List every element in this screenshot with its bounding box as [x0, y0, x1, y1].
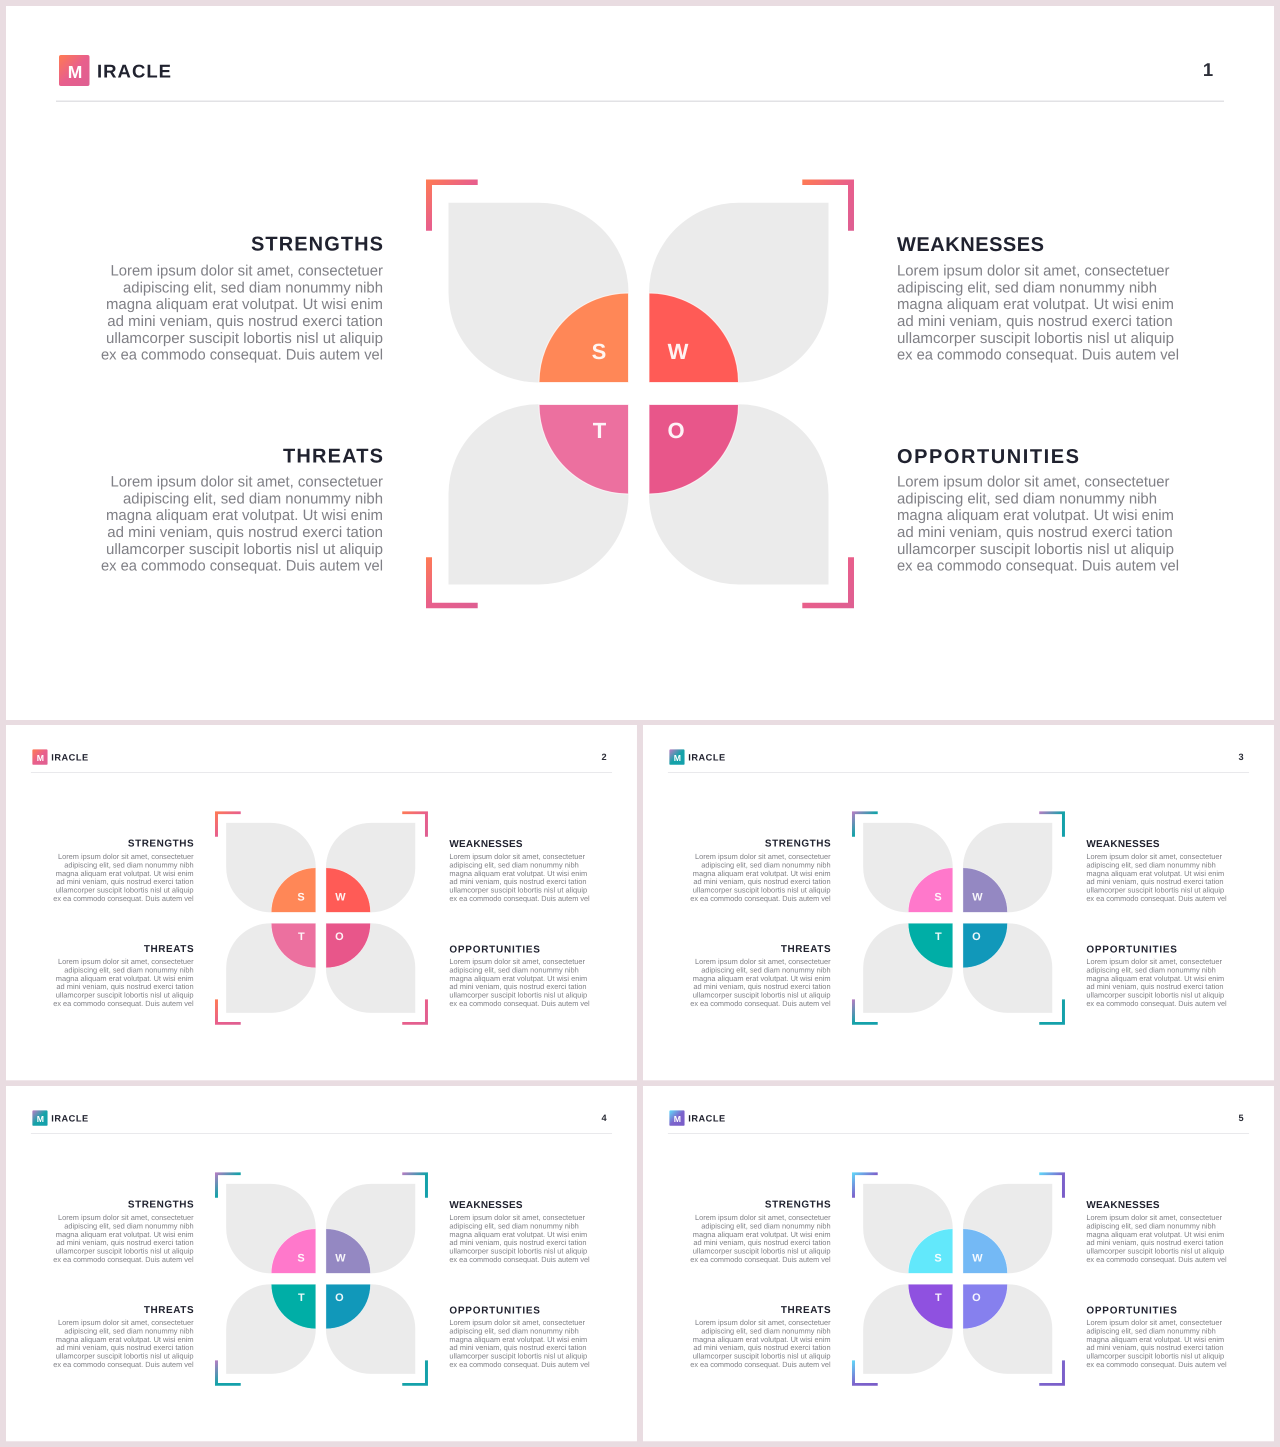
text: opportunities: adipiscing elit, sed diam nonummy nibh [1086, 966, 1216, 974]
text: strengths: magna aliquam erat volutpat. Ut wisi enim [693, 869, 831, 878]
text: weaknesses: magna aliquam erat volutpat. Ut wisi enim [449, 1230, 587, 1239]
text: weaknesses: Lorem ipsum dolor sit amet, consectetuer [449, 853, 585, 861]
quadrant O: O [972, 930, 981, 942]
text: weaknesses [1086, 1214, 1227, 1264]
quadrant O [963, 1284, 1007, 1329]
text: threats: Lorem ipsum dolor sit amet, consectetuer [695, 958, 831, 966]
heading: strengths: STRENGTHS [765, 1199, 831, 1210]
text: strengths: adipiscing elit, sed diam nonummy nibh [123, 279, 383, 296]
quadrant T: T [935, 1291, 942, 1303]
text: weaknesses: magna aliquam erat volutpat. Ut wisi enim [1086, 1230, 1224, 1239]
text: strengths: ullamcorper suscipit lobortis nisl ut aliquip [106, 330, 383, 347]
text: threats: adipiscing elit, sed diam nonummy nibh [64, 1327, 194, 1335]
quadrant O: O [972, 1291, 981, 1303]
header rule [31, 771, 612, 774]
panel: slide 1 main SWOT [6, 6, 1274, 720]
panel: slide 2 red theme [6, 725, 637, 1080]
text: weaknesses: ex ea commodo consequat. Duis autem vel [1086, 895, 1227, 903]
grey petals [226, 1184, 415, 1374]
text: threats: ad mini veniam, quis nostrud exerci tation [107, 524, 383, 541]
text: threats: Lorem ipsum dolor sit amet, consectetuer [695, 1319, 831, 1327]
text: threats: magna aliquam erat volutpat. Ut wisi enim [56, 974, 194, 983]
quadrant W: W [335, 1252, 346, 1264]
text: opportunities [1086, 1319, 1227, 1369]
header rule [31, 1132, 612, 1135]
text: threats: adipiscing elit, sed diam nonummy nibh [701, 1327, 831, 1335]
text: opportunities: ad mini veniam, quis nostrud exerci tation [897, 524, 1173, 541]
text: strengths: magna aliquam erat volutpat. Ut wisi enim [56, 869, 194, 878]
text: weaknesses: magna aliquam erat volutpat. Ut wisi enim [1086, 869, 1224, 878]
quadrant O [963, 923, 1007, 968]
text: threats: magna aliquam erat volutpat. Ut wisi enim [106, 507, 383, 524]
text: weaknesses: magna aliquam erat volutpat. Ut wisi enim [897, 296, 1174, 313]
quadrant S: S [297, 1252, 305, 1264]
text: opportunities: ullamcorper suscipit lobortis nisl ut aliquip [1086, 991, 1224, 1000]
text: threats: ad mini veniam, quis nostrud exerci tation [56, 983, 194, 991]
text: opportunities: ad mini veniam, quis nostrud exerci tation [449, 983, 587, 991]
text: opportunities: Lorem ipsum dolor sit amet, consectetuer [1086, 1319, 1222, 1327]
quadrant W: W [668, 339, 689, 364]
quadrant T [908, 923, 953, 968]
text: strengths: ad mini veniam, quis nostrud exerci tation [56, 878, 194, 886]
logo: IRACLE [688, 752, 725, 762]
panel: slide 4 teal theme [6, 1086, 637, 1441]
text: weaknesses: adipiscing elit, sed diam nonummy nibh [449, 1222, 579, 1231]
heading: weaknesses: WEAKNESSES [1086, 838, 1160, 849]
page number: 3 [1239, 751, 1244, 762]
text: opportunities: ad mini veniam, quis nostrud exerci tation [1086, 983, 1224, 991]
text: threats: adipiscing elit, sed diam nonummy nibh [64, 966, 194, 974]
quadrant W [963, 868, 1007, 912]
text: strengths: ad mini veniam, quis nostrud exerci tation [693, 878, 831, 886]
text: threats: ad mini veniam, quis nostrud exerci tation [56, 1344, 194, 1352]
panel: slide 3 teal theme [643, 725, 1274, 1080]
quadrant S: S [934, 1252, 942, 1264]
text: opportunities: magna aliquam erat volutpat. Ut wisi enim [897, 507, 1174, 524]
text: weaknesses: ullamcorper suscipit lobortis nisl ut aliquip [897, 330, 1174, 347]
text: weaknesses [1086, 853, 1227, 903]
corner brackets [215, 811, 428, 1025]
page number: 5 [1239, 1112, 1244, 1123]
text: opportunities: adipiscing elit, sed diam nonummy nibh [449, 966, 579, 974]
text: strengths: magna aliquam erat volutpat. Ut wisi enim [106, 296, 383, 313]
quadrant S [539, 293, 628, 382]
corner brackets [852, 811, 1065, 1025]
quadrant S [271, 1229, 316, 1273]
quadrant T: T [935, 930, 942, 942]
logo: M [68, 62, 82, 82]
text: weaknesses: Lorem ipsum dolor sit amet, consectetuer [449, 1214, 585, 1222]
quadrant O: O [335, 1291, 344, 1303]
logo [669, 1110, 725, 1126]
corner brackets [852, 1172, 1065, 1386]
heading: opportunities: OPPORTUNITIES [449, 1305, 540, 1316]
text: strengths: ullamcorper suscipit lobortis nisl ut aliquip [693, 886, 831, 895]
heading: strengths: STRENGTHS [128, 838, 194, 849]
quadrant W: W [972, 891, 983, 903]
text: opportunities: magna aliquam erat volutpat. Ut wisi enim [449, 974, 587, 983]
quadrant O [326, 923, 370, 968]
quadrant W: W [972, 1252, 983, 1264]
text: strengths: magna aliquam erat volutpat. Ut wisi enim [693, 1230, 831, 1239]
text: strengths: ex ea commodo consequat. Duis autem vel [101, 347, 383, 364]
text: opportunities: magna aliquam erat volutpat. Ut wisi enim [1086, 1335, 1224, 1344]
heading: opportunities: OPPORTUNITIES [449, 944, 540, 955]
text: threats: magna aliquam erat volutpat. Ut wisi enim [693, 1335, 831, 1344]
text: threats: adipiscing elit, sed diam nonummy nibh [701, 966, 831, 974]
text: threats: ex ea commodo consequat. Duis autem vel [690, 1000, 831, 1008]
logo: IRACLE [688, 1113, 725, 1123]
text: opportunities: Lorem ipsum dolor sit amet, consectetuer [449, 1319, 585, 1327]
text: opportunities: ex ea commodo consequat. Duis autem vel [1086, 1000, 1227, 1008]
text: threats: ex ea commodo consequat. Duis autem vel [53, 1361, 194, 1369]
text: strengths [690, 1214, 831, 1264]
heading: strengths: STRENGTHS [251, 234, 383, 256]
text: strengths: adipiscing elit, sed diam nonummy nibh [64, 861, 194, 870]
text: weaknesses: ex ea commodo consequat. Duis autem vel [1086, 1256, 1227, 1264]
text: opportunities: ex ea commodo consequat. Duis autem vel [1086, 1361, 1227, 1369]
text: threats: ullamcorper suscipit lobortis nisl ut aliquip [56, 1352, 194, 1361]
text: opportunities: adipiscing elit, sed diam nonummy nibh [897, 490, 1157, 507]
logo: IRACLE [51, 752, 88, 762]
text: weaknesses: adipiscing elit, sed diam nonummy nibh [449, 861, 579, 870]
heading: opportunities: OPPORTUNITIES [1086, 944, 1177, 955]
quadrant O: O [335, 930, 344, 942]
quadrant T: T [593, 418, 607, 443]
quadrant W [326, 1229, 370, 1273]
text: threats: Lorem ipsum dolor sit amet, consectetuer [58, 1319, 194, 1327]
text: opportunities: ad mini veniam, quis nostrud exerci tation [449, 1344, 587, 1352]
header rule [668, 1132, 1249, 1135]
text: strengths: ullamcorper suscipit lobortis nisl ut aliquip [56, 1247, 194, 1256]
quadrant W [963, 1229, 1007, 1273]
text: strengths: adipiscing elit, sed diam nonummy nibh [701, 861, 831, 870]
text: strengths: adipiscing elit, sed diam nonummy nibh [64, 1222, 194, 1231]
quadrant W [649, 293, 738, 382]
text: opportunities [1086, 958, 1227, 1008]
text: weaknesses [449, 853, 590, 903]
text: threats: ad mini veniam, quis nostrud exerci tation [693, 1344, 831, 1352]
text: weaknesses: Lorem ipsum dolor sit amet, consectetuer [1086, 1214, 1222, 1222]
text: opportunities: ex ea commodo consequat. Duis autem vel [449, 1361, 590, 1369]
text: threats: ex ea commodo consequat. Duis autem vel [101, 558, 383, 575]
quadrant T [539, 404, 628, 494]
heading: weaknesses: WEAKNESSES [449, 838, 523, 849]
text: opportunities: magna aliquam erat volutpat. Ut wisi enim [449, 1335, 587, 1344]
text: opportunities: ad mini veniam, quis nostrud exerci tation [1086, 1344, 1224, 1352]
text: strengths: ad mini veniam, quis nostrud exerci tation [107, 313, 383, 330]
text: threats: Lorem ipsum dolor sit amet, consectetuer [110, 474, 383, 490]
text: weaknesses: adipiscing elit, sed diam nonummy nibh [1086, 1222, 1216, 1231]
heading: weaknesses: WEAKNESSES [449, 1199, 523, 1210]
text: weaknesses: Lorem ipsum dolor sit amet, consectetuer [897, 262, 1170, 280]
page number: 4 [602, 1112, 607, 1123]
text: threats: ullamcorper suscipit lobortis nisl ut aliquip [106, 541, 383, 558]
text: weaknesses: Lorem ipsum dolor sit amet, consectetuer [1086, 853, 1222, 861]
text: threats: ex ea commodo consequat. Duis autem vel [690, 1361, 831, 1369]
quadrant T [908, 1284, 953, 1329]
quadrant T: T [298, 1291, 305, 1303]
text: opportunities: ullamcorper suscipit lobortis nisl ut aliquip [449, 1352, 587, 1361]
quadrant S [908, 868, 953, 912]
corner brackets [426, 180, 854, 608]
logo: M [37, 753, 44, 763]
heading: threats: THREATS [781, 944, 831, 955]
text: strengths: ad mini veniam, quis nostrud exerci tation [56, 1239, 194, 1247]
heading: strengths: STRENGTHS [128, 1199, 194, 1210]
text: strengths: ad mini veniam, quis nostrud exerci tation [693, 1239, 831, 1247]
text: weaknesses: ad mini veniam, quis nostrud exerci tation [1086, 1239, 1224, 1247]
heading: threats: THREATS [781, 1305, 831, 1316]
text: threats [101, 474, 383, 575]
text: opportunities: ex ea commodo consequat. Duis autem vel [449, 1000, 590, 1008]
text: opportunities: Lorem ipsum dolor sit amet, consectetuer [1086, 958, 1222, 966]
text: threats: ullamcorper suscipit lobortis nisl ut aliquip [693, 1352, 831, 1361]
text: strengths: Lorem ipsum dolor sit amet, consectetuer [58, 1214, 194, 1222]
text: threats [690, 958, 831, 1008]
text: weaknesses: ad mini veniam, quis nostrud exerci tation [449, 878, 587, 886]
text: weaknesses: adipiscing elit, sed diam nonummy nibh [897, 279, 1157, 296]
quadrant T: T [298, 930, 305, 942]
text: opportunities [449, 958, 590, 1008]
text: strengths: ullamcorper suscipit lobortis nisl ut aliquip [693, 1247, 831, 1256]
quadrant O [326, 1284, 370, 1329]
text: strengths [53, 1214, 194, 1264]
text: weaknesses: magna aliquam erat volutpat. Ut wisi enim [449, 869, 587, 878]
text: opportunities: adipiscing elit, sed diam nonummy nibh [1086, 1327, 1216, 1335]
text: weaknesses: adipiscing elit, sed diam nonummy nibh [1086, 861, 1216, 870]
logo [669, 749, 725, 765]
text: strengths: Lorem ipsum dolor sit amet, consectetuer [695, 853, 831, 861]
heading: weaknesses: WEAKNESSES [1086, 1199, 1160, 1210]
text: opportunities: Lorem ipsum dolor sit amet, consectetuer [897, 474, 1170, 490]
text: threats [690, 1319, 831, 1369]
heading: threats: THREATS [144, 944, 194, 955]
text: opportunities [449, 1319, 590, 1369]
heading: weaknesses: WEAKNESSES [897, 234, 1044, 256]
text: strengths: Lorem ipsum dolor sit amet, consectetuer [695, 1214, 831, 1222]
text: opportunities: Lorem ipsum dolor sit amet, consectetuer [449, 958, 585, 966]
page number: 2 [602, 751, 607, 762]
text: weaknesses: ullamcorper suscipit lobortis nisl ut aliquip [449, 886, 587, 895]
text: weaknesses: ullamcorper suscipit lobortis nisl ut aliquip [1086, 886, 1224, 895]
text: threats: ad mini veniam, quis nostrud exerci tation [693, 983, 831, 991]
text: strengths: adipiscing elit, sed diam nonummy nibh [701, 1222, 831, 1231]
text: weaknesses [449, 1214, 590, 1264]
quadrant T [271, 923, 316, 968]
text: weaknesses: ex ea commodo consequat. Duis autem vel [449, 1256, 590, 1264]
text: strengths [101, 262, 383, 364]
text: strengths: ex ea commodo consequat. Duis autem vel [53, 1256, 194, 1264]
header rule [56, 100, 1224, 102]
logo: M [674, 1114, 681, 1124]
quadrant O [649, 404, 738, 494]
grey petals [863, 823, 1052, 1013]
heading: opportunities: OPPORTUNITIES [1086, 1305, 1177, 1316]
text: opportunities: ullamcorper suscipit lobortis nisl ut aliquip [1086, 1352, 1224, 1361]
text: weaknesses: ullamcorper suscipit lobortis nisl ut aliquip [449, 1247, 587, 1256]
quadrant S: S [592, 339, 606, 364]
text: threats [53, 958, 194, 1008]
heading: opportunities: OPPORTUNITIES [897, 446, 1079, 468]
text: weaknesses: ad mini veniam, quis nostrud exerci tation [449, 1239, 587, 1247]
text: threats: adipiscing elit, sed diam nonummy nibh [123, 490, 383, 507]
quadrant T [271, 1284, 316, 1329]
text: weaknesses: ad mini veniam, quis nostrud exerci tation [897, 313, 1173, 330]
logo: M [674, 753, 681, 763]
heading: strengths: STRENGTHS [765, 838, 831, 849]
quadrant S: S [297, 891, 305, 903]
corner brackets [215, 1172, 428, 1386]
text: threats: ullamcorper suscipit lobortis nisl ut aliquip [56, 991, 194, 1000]
panel: slide 5 blue purple theme [643, 1086, 1274, 1441]
quadrant W [326, 868, 370, 912]
text: weaknesses: ex ea commodo consequat. Duis autem vel [897, 347, 1179, 364]
text: opportunities [897, 474, 1179, 575]
text: weaknesses: ullamcorper suscipit lobortis nisl ut aliquip [1086, 1247, 1224, 1256]
grey petals [863, 1184, 1052, 1374]
text: strengths: Lorem ipsum dolor sit amet, consectetuer [58, 853, 194, 861]
text: weaknesses [897, 262, 1179, 364]
text: strengths: ex ea commodo consequat. Duis autem vel [690, 895, 831, 903]
text: threats: magna aliquam erat volutpat. Ut wisi enim [693, 974, 831, 983]
text: opportunities: ullamcorper suscipit lobortis nisl ut aliquip [449, 991, 587, 1000]
logo [59, 55, 171, 86]
text: strengths: ullamcorper suscipit lobortis nisl ut aliquip [56, 886, 194, 895]
grey petals [226, 823, 415, 1013]
logo: IRACLE [51, 1113, 88, 1123]
text: strengths [53, 853, 194, 903]
text: threats [53, 1319, 194, 1369]
text: threats: magna aliquam erat volutpat. Ut wisi enim [56, 1335, 194, 1344]
text: strengths [690, 853, 831, 903]
text: strengths: Lorem ipsum dolor sit amet, consectetuer [110, 262, 383, 280]
text: threats: ullamcorper suscipit lobortis nisl ut aliquip [693, 991, 831, 1000]
heading: threats: THREATS [283, 446, 383, 468]
text: opportunities: ex ea commodo consequat. Duis autem vel [897, 558, 1179, 575]
grey petals [448, 203, 828, 584]
text: opportunities: adipiscing elit, sed diam nonummy nibh [449, 1327, 579, 1335]
text: weaknesses: ad mini veniam, quis nostrud exerci tation [1086, 878, 1224, 886]
text: strengths: ex ea commodo consequat. Duis autem vel [690, 1256, 831, 1264]
logo [32, 749, 88, 765]
text: opportunities: ullamcorper suscipit lobortis nisl ut aliquip [897, 541, 1174, 558]
logo: M [37, 1114, 44, 1124]
logo [32, 1110, 88, 1126]
quadrant S [908, 1229, 953, 1273]
text: weaknesses: ex ea commodo consequat. Duis autem vel [449, 895, 590, 903]
text: threats: Lorem ipsum dolor sit amet, consectetuer [58, 958, 194, 966]
text: threats: ex ea commodo consequat. Duis autem vel [53, 1000, 194, 1008]
text: strengths: magna aliquam erat volutpat. Ut wisi enim [56, 1230, 194, 1239]
page number: 1 [1203, 59, 1213, 80]
heading: threats: THREATS [144, 1305, 194, 1316]
quadrant O: O [667, 418, 685, 443]
quadrant S: S [934, 891, 942, 903]
logo: IRACLE [97, 60, 171, 81]
quadrant W: W [335, 891, 346, 903]
text: strengths: ex ea commodo consequat. Duis autem vel [53, 895, 194, 903]
text: opportunities: magna aliquam erat volutpat. Ut wisi enim [1086, 974, 1224, 983]
header rule [668, 771, 1249, 774]
quadrant S [271, 868, 316, 912]
